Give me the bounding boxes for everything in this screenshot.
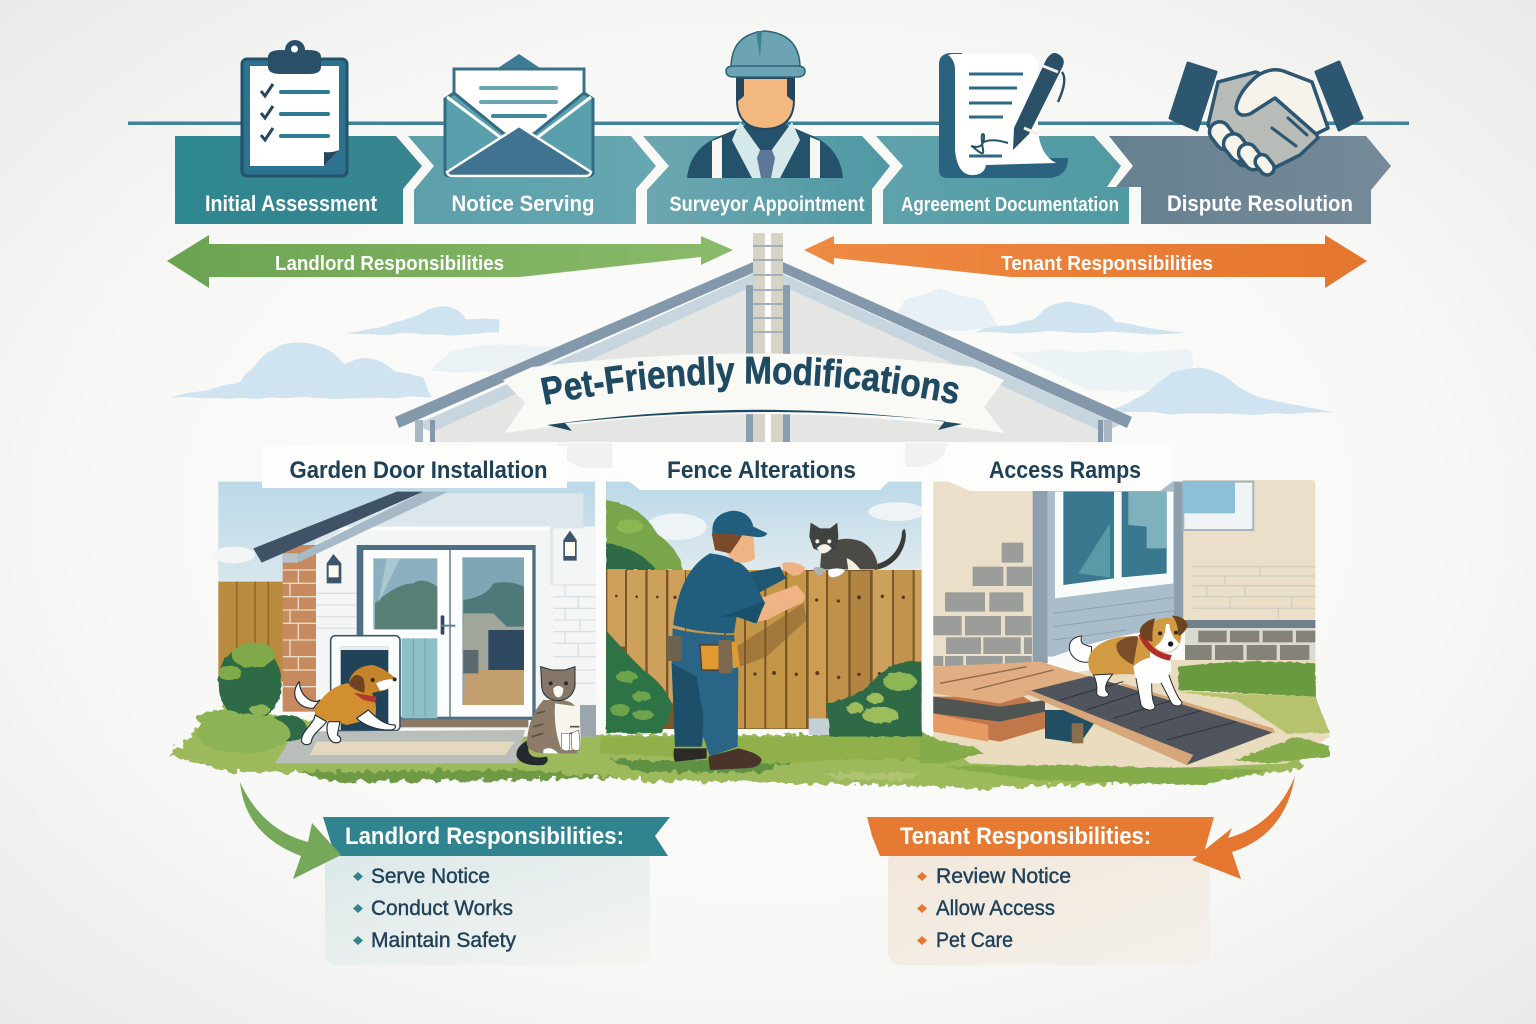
- house wall: [933, 480, 1315, 667]
- arrow: curved green: [240, 782, 341, 879]
- pet door: [331, 636, 400, 731]
- worker: [667, 511, 805, 770]
- chimney: [753, 233, 783, 442]
- arrow: curved orange: [1192, 776, 1295, 879]
- landlord ribbon: Landlord Responsibilities:: [345, 823, 624, 850]
- ramp: [1022, 676, 1275, 765]
- tenant list: Allow Access: [936, 897, 1055, 920]
- wooden fence: [606, 569, 922, 735]
- landlord list: Conduct Works: [371, 897, 513, 920]
- icon: surveyor: [687, 31, 843, 178]
- grass strip: [600, 737, 933, 763]
- tenant list: Review Notice: [936, 865, 1071, 888]
- tree: [606, 500, 683, 570]
- arrow: landlord responsibilities: Landlord Responsibilities: [275, 252, 504, 275]
- arrow: landlord responsibilities: [167, 235, 733, 288]
- icon: agreement scroll and pen: [939, 53, 1068, 178]
- white posts: [600, 470, 933, 727]
- scene background: [212, 482, 596, 737]
- section label: garden door installation: Garden Door Installation: [290, 457, 548, 484]
- section label: fence alterations: Fence Alterations: [667, 457, 856, 484]
- step: dispute resolution: Dispute Resolution: [1167, 191, 1353, 216]
- bush: [197, 642, 307, 753]
- house roof: [395, 262, 1132, 442]
- landlord list: [353, 865, 516, 952]
- step: initial assessment: Initial Assessment: [205, 191, 378, 216]
- landlord list: Serve Notice: [371, 865, 490, 888]
- title text: Pet-Friendly Modifications: [540, 356, 959, 405]
- section label: access ramps: [945, 446, 1172, 491]
- scene background: [606, 482, 925, 572]
- tenant ribbon: Tenant Responsibilities:: [900, 823, 1151, 850]
- icon: clipboard: [242, 40, 347, 176]
- section label: garden door installation: [262, 446, 567, 488]
- process steps: [175, 136, 1391, 224]
- tenant ribbon: [867, 817, 1214, 856]
- dog entering pet door: [295, 665, 397, 745]
- panel: tenant responsibilities: [867, 817, 1214, 965]
- lamps: [327, 531, 577, 583]
- arrow: tenant responsibilities: Tenant Responsibilities: [1001, 252, 1213, 275]
- faint wall shade under roof: [558, 443, 948, 468]
- tenant list: [917, 865, 1071, 952]
- panel: access ramps scene: [920, 480, 1330, 785]
- tenant card: [888, 850, 1210, 965]
- step: surveyor appointment: [643, 136, 890, 224]
- clouds: [170, 288, 1335, 413]
- bush right: [827, 662, 922, 737]
- deck: [933, 662, 1090, 742]
- step: agreement documentation: Agreement Documentation: [901, 193, 1119, 216]
- dog on ramp: [1069, 616, 1187, 710]
- landlord card: [325, 850, 650, 965]
- section label: fence alterations: [614, 443, 900, 490]
- icon: envelope: [445, 54, 593, 176]
- patio step: [275, 730, 525, 763]
- arrow: tenant responsibilities: [804, 235, 1367, 288]
- step: notice serving: Notice Serving: [452, 191, 594, 216]
- landlord list: Maintain Safety: [371, 929, 516, 952]
- title banner: [503, 354, 1004, 433]
- step: agreement documentation: [876, 136, 1129, 224]
- step: initial assessment: [175, 136, 422, 224]
- section label: access ramps: Access Ramps: [989, 457, 1141, 484]
- tenant list: Pet Care: [936, 929, 1013, 952]
- panel: fence alterations scene: [600, 470, 933, 770]
- step: dispute resolution: [1109, 136, 1391, 224]
- ground grass: [168, 705, 1310, 788]
- step: surveyor appointment: Surveyor Appointment: [670, 193, 865, 216]
- landlord ribbon: [323, 817, 670, 856]
- panel: garden door scene: [197, 482, 596, 765]
- cat on fence: [809, 523, 906, 577]
- timeline line: [128, 122, 1409, 125]
- cat sitting: [516, 667, 581, 765]
- patio doors: [357, 545, 536, 727]
- icon: handshake: [1170, 62, 1362, 178]
- bush left: [606, 630, 672, 733]
- roof: [253, 492, 448, 563]
- panel: landlord responsibilities: [323, 817, 670, 965]
- lawn and path: [920, 660, 1330, 785]
- step: notice serving: [408, 136, 656, 224]
